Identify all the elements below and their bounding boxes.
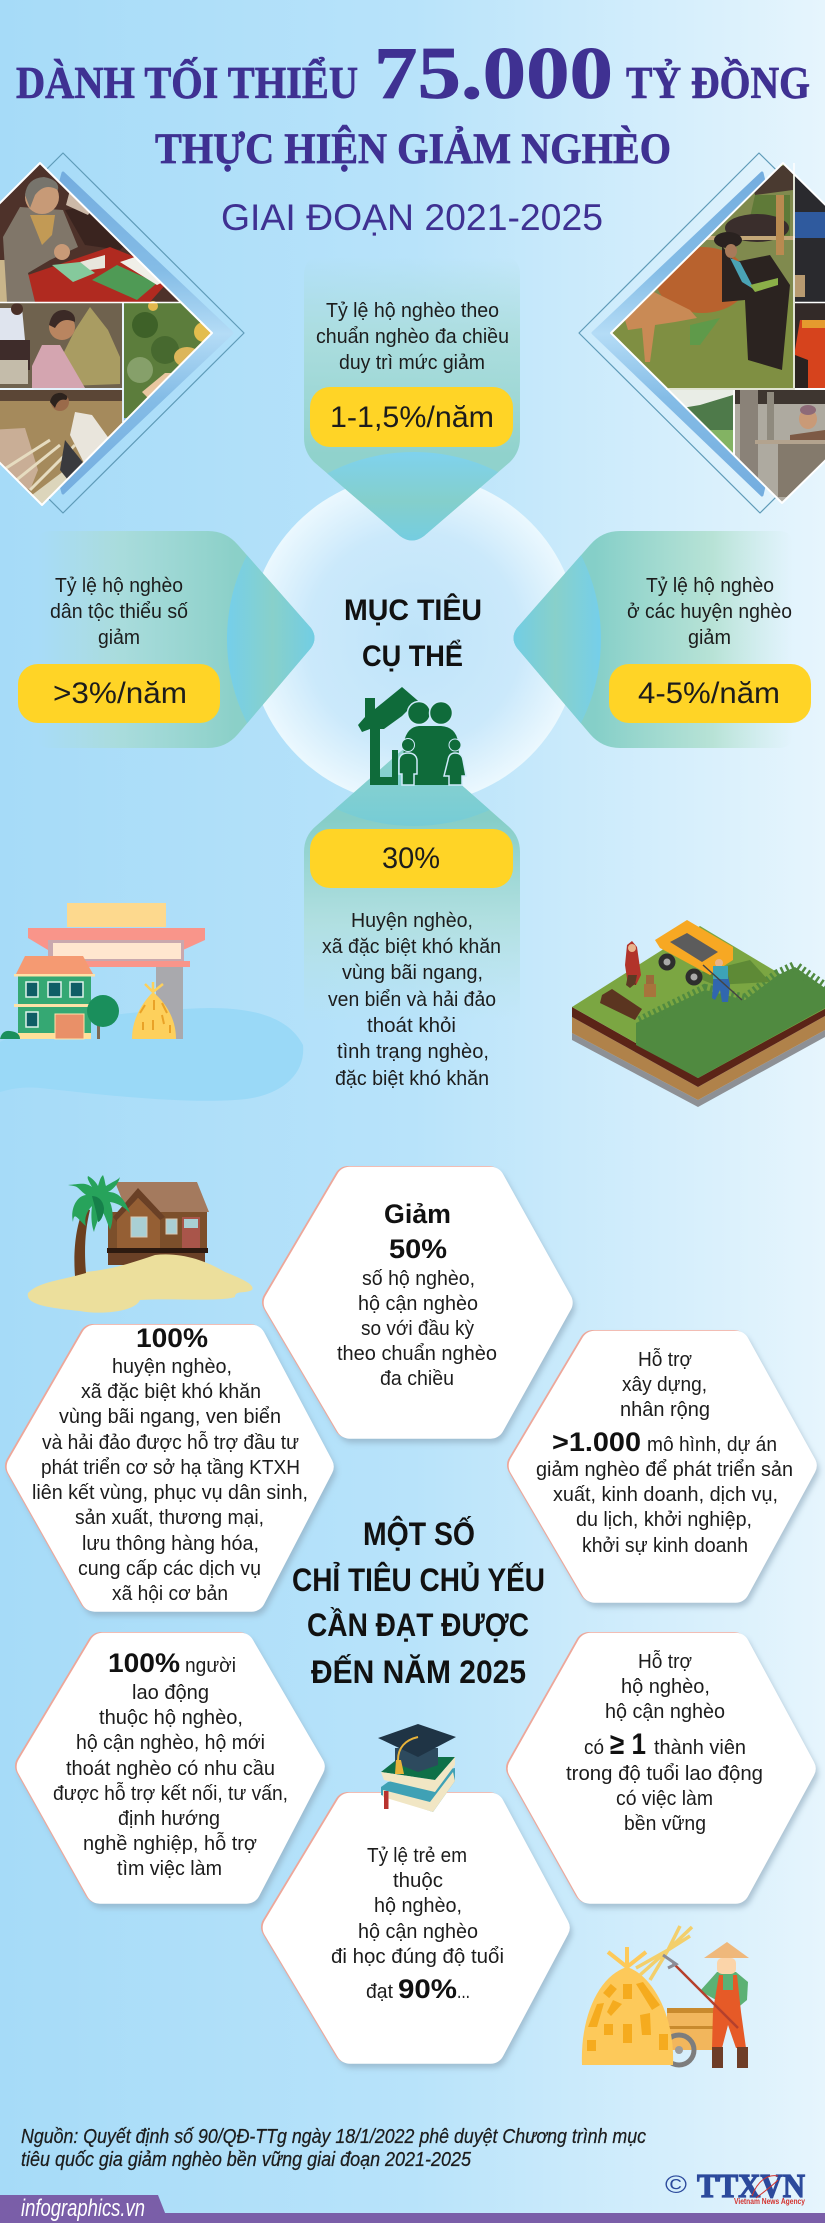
panel: support models xyxy=(521,1344,805,1593)
icon: stilt house on island with palm xyxy=(28,1175,253,1313)
panel: reduce 50%: đa chiều xyxy=(380,1368,454,1390)
panel: 100% workers: người xyxy=(185,1655,236,1677)
panel: support models: Hỗ trợ xyxy=(638,1348,692,1371)
panel: support models: du lịch, khởi nghiệp, xyxy=(576,1509,752,1531)
title: DÀNH TỐI THIỂU xyxy=(16,57,358,108)
panel: 100% districts: liên kết vùng, phục vụ dân sinh, xyxy=(32,1482,308,1504)
panel: reduce 50%: theo chuẩn nghèo xyxy=(337,1343,497,1365)
panel: 100% workers: định hướng xyxy=(118,1808,220,1830)
panel: support models: xây dựng, xyxy=(622,1374,707,1396)
panel: 100% workers: thuộc hộ nghèo, xyxy=(99,1707,243,1729)
panel: 100% workers: 100% xyxy=(108,1648,180,1678)
panel: 100% workers: hộ cận nghèo, hộ mới xyxy=(76,1732,265,1754)
panel: sustainable employment: hộ cận nghèo xyxy=(605,1701,725,1723)
title xyxy=(16,33,810,238)
panel: 100% workers: nghề nghiệp, hỗ trợ xyxy=(83,1832,257,1855)
panel: 100% districts: phát triển cơ sở hạ tầng KTXH xyxy=(41,1457,300,1479)
footer bar xyxy=(0,2195,825,2223)
panel: support models: khởi sự kinh doanh xyxy=(582,1535,748,1557)
panel: right goal xyxy=(514,531,811,748)
panel: sustainable employment: có việc làm xyxy=(616,1788,713,1810)
pond xyxy=(0,1008,303,1101)
panel: sustainable employment: ≥ 1 xyxy=(610,1728,646,1761)
panel: left goal: giảm xyxy=(98,627,140,649)
panel: bottom goal xyxy=(304,750,520,1088)
panel: 100% districts: cung cấp các dịch vụ xyxy=(78,1558,261,1580)
panel: children in school: thuộc xyxy=(393,1870,443,1892)
panel: sustainable employment: có xyxy=(584,1737,604,1759)
heading: specific goals: MỤC TIÊU xyxy=(344,593,482,627)
panel: 100% districts: lưu thông hàng hóa, xyxy=(82,1533,259,1555)
panel: bottom goal: xã đặc biệt khó khăn xyxy=(322,936,501,958)
logo: TTXVN: TTXVN xyxy=(697,2168,805,2205)
panel: top goal: chuẩn nghèo đa chiều xyxy=(316,326,509,348)
icon: farmer with haystack and cart xyxy=(582,1926,749,2068)
panel: reduce 50%: Giảm xyxy=(384,1199,451,1229)
title: 75.000 xyxy=(374,33,613,115)
panel: reduce 50%: 50% xyxy=(389,1234,447,1264)
heading: key targets by 2025: ĐẾN NĂM 2025 xyxy=(311,1654,526,1690)
photo collage left xyxy=(0,153,244,513)
logo: TTXVN: © xyxy=(665,2171,688,2199)
panel: 100% districts: vùng bãi ngang, ven biển xyxy=(59,1406,281,1428)
panel: 100% districts: xã hội cơ bản xyxy=(112,1583,228,1605)
panel: children in school: Tỷ lệ trẻ em xyxy=(367,1845,467,1867)
panel: sustainable employment xyxy=(520,1646,804,1894)
panel: children in school xyxy=(275,1806,558,2054)
panel: bottom goal: vùng bãi ngang, xyxy=(342,962,483,984)
panel: sustainable employment: Hỗ trợ xyxy=(638,1650,692,1673)
panel: 100% workers: thoát nghèo có nhu cầu xyxy=(66,1758,275,1780)
title: THỰC HIỆN GIẢM NGHÈO xyxy=(155,126,671,173)
panel: support models: xuất, kinh doanh, dịch vụ, xyxy=(553,1484,778,1506)
panel: top goal: Tỷ lệ hộ nghèo theo xyxy=(326,300,499,322)
panel: left goal: dân tộc thiểu số xyxy=(50,601,188,623)
panel: reduce 50%: số hộ nghèo, xyxy=(362,1268,475,1290)
panel: top goal: duy trì mức giảm xyxy=(339,352,485,374)
panel: sustainable employment: thành viên xyxy=(654,1737,746,1759)
panel: 100% workers: tìm việc làm xyxy=(117,1858,222,1880)
panel: 100% districts: và hải đảo được hỗ trợ đầu tư xyxy=(42,1431,299,1454)
heading: key targets by 2025: CẦN ĐẠT ĐƯỢC xyxy=(307,1607,529,1643)
source note: Nguồn: Quyết định số 90/QĐ-TTg ngày 18/1/2022 phê duyệt Chương trình mục xyxy=(21,2126,646,2148)
panel: 100% districts: xã đặc biệt khó khăn xyxy=(81,1381,261,1403)
panel: left goal: >3%/năm xyxy=(53,677,187,710)
icon: graduation cap on books xyxy=(378,1724,456,1812)
photo collage right xyxy=(579,153,825,513)
panel: bottom goal: tình trạng nghèo, xyxy=(337,1041,489,1063)
panel: children in school: hộ cận nghèo xyxy=(358,1921,478,1943)
panel: right goal: giảm xyxy=(688,627,731,649)
panel: 100% districts: sản xuất, thương mại, xyxy=(75,1507,264,1529)
panel: children in school: hộ nghèo, xyxy=(374,1895,462,1917)
central circle xyxy=(249,474,579,804)
panel: 100% districts: 100% xyxy=(136,1323,208,1353)
panel: children in school: đạt xyxy=(366,1981,393,2003)
panel: 100% workers: được hỗ trợ kết nối, tư vấn, xyxy=(53,1782,288,1805)
panel: 100% workers xyxy=(29,1646,313,1894)
panel: right goal: Tỷ lệ hộ nghèo xyxy=(646,575,774,597)
icon: farm field with cart and workers xyxy=(572,920,825,1107)
panel: 100% districts: huyện nghèo, xyxy=(112,1356,232,1378)
panel: sustainable employment: hộ nghèo, xyxy=(621,1676,710,1698)
panel: top goal xyxy=(304,280,520,540)
panel: reduce 50%: hộ cận nghèo xyxy=(358,1293,478,1315)
source note: tiêu quốc gia giảm nghèo bền vững giai đoạn 2021-2025 xyxy=(21,2149,472,2171)
panel: 100% districts xyxy=(19,1323,322,1605)
panel: bottom goal: Huyện nghèo, xyxy=(351,910,473,932)
panel: children in school: đi học đúng độ tuổi xyxy=(331,1946,504,1968)
panel: support models: nhân rộng xyxy=(620,1399,710,1421)
footer bar: infographics.vn xyxy=(21,2195,145,2222)
panel: bottom goal: đặc biệt khó khăn xyxy=(335,1068,489,1090)
title: GIAI ĐOẠN 2021-2025 xyxy=(221,197,603,238)
panel: support models: >1.000 xyxy=(552,1427,641,1457)
panel: support models: mô hình, dự án xyxy=(647,1434,777,1456)
panel: right goal: 4-5%/năm xyxy=(638,677,780,710)
icon: family and house xyxy=(358,687,466,785)
panel: support models: giảm nghèo để phát triển sản xyxy=(536,1459,793,1481)
heading: key targets by 2025 xyxy=(292,1516,545,1690)
panel: sustainable employment: trong độ tuổi lao động xyxy=(566,1763,763,1785)
panel: 100% workers: lao động xyxy=(132,1682,209,1704)
panel: bottom goal: 30% xyxy=(382,842,440,875)
heading: specific goals: CỤ THỂ xyxy=(362,639,463,673)
panel: bottom goal: thoát khỏi xyxy=(367,1015,456,1037)
panel: children in school: ... xyxy=(457,1981,470,2003)
panel: sustainable employment: bền vững xyxy=(624,1813,706,1835)
logo: TTXVN: Vietnam News Agency xyxy=(734,2197,805,2206)
panel: right goal: ở các huyện nghèo xyxy=(627,601,792,623)
panel: top goal: 1-1,5%/năm xyxy=(330,401,494,434)
panel: left goal: Tỷ lệ hộ nghèo xyxy=(55,575,183,597)
panel: reduce 50%: so với đầu kỳ xyxy=(361,1318,474,1340)
heading: key targets by 2025: MỘT SỐ xyxy=(363,1516,475,1552)
icon: commune gate and house xyxy=(0,903,205,1039)
heading: specific goals xyxy=(344,593,482,673)
panel: left goal xyxy=(18,531,314,748)
panel: reduce 50% xyxy=(276,1180,561,1429)
heading: key targets by 2025: CHỈ TIÊU CHỦ YẾU xyxy=(292,1562,545,1598)
source note xyxy=(21,2126,646,2171)
panel: bottom goal: ven biển và hải đảo xyxy=(328,989,496,1011)
panel: children in school: 90% xyxy=(398,1974,457,2004)
